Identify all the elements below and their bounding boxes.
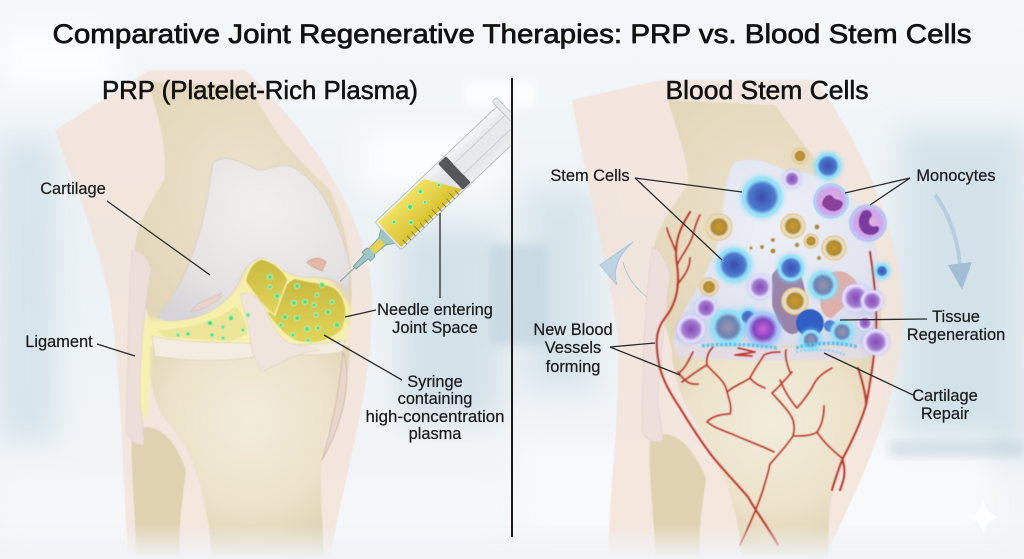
label: New Blood Vessels forming: Vessels: [545, 339, 601, 357]
right ligament: [322, 352, 347, 460]
label: Syringe containing high-concentration plasma: [324, 335, 504, 443]
label: Syringe containing high-concentration plasma: high-concentration: [366, 408, 504, 426]
title: Comparative Joint Regenerative Therapies: PRP vs. Blood Stem Cells: [52, 19, 972, 49]
needle: [340, 268, 355, 282]
label: Cartilage: Cartilage: [40, 180, 106, 198]
fibula: [132, 427, 186, 559]
fade at bottom of both legs: [0, 525, 1024, 559]
femur bone: [135, 82, 352, 325]
plasma: [378, 178, 462, 247]
femur bone: [652, 100, 881, 350]
fibula: [650, 434, 706, 559]
icon: syringe with plasma: [340, 98, 510, 282]
label: Tissue Regeneration: [840, 308, 1005, 344]
heading: PRP: PRP (Platelet-Rich Plasma): [102, 75, 418, 105]
label: Ligament: [25, 333, 135, 356]
cartilage on femur: [157, 159, 350, 321]
label: Syringe containing high-concentration plasma: containing: [398, 390, 472, 408]
lateral ligament: [126, 250, 151, 445]
cruciate ligament: [240, 293, 320, 372]
label: Cartilage Repair: [824, 353, 978, 423]
joint glow: [137, 262, 352, 420]
lateral ligament: [642, 247, 670, 442]
scale marks: [401, 189, 459, 244]
label: Tissue Regeneration: Tissue: [932, 308, 980, 326]
leg skin silhouette: [55, 70, 372, 559]
plateau band: [672, 340, 872, 361]
tibia: [149, 345, 350, 559]
new blood vessels: [657, 212, 876, 545]
label: Needle entering Joint Space: [345, 213, 493, 337]
cartilage dome: [675, 160, 879, 345]
label: New Blood Vessels forming: forming: [546, 358, 600, 376]
tibia: [672, 350, 872, 559]
barrel: [375, 107, 523, 250]
label: New Blood Vessels forming: New Blood: [533, 321, 613, 339]
label: Monocytes: Monocytes: [916, 167, 996, 185]
label: Stem Cells: [550, 167, 742, 260]
label: Monocytes: [845, 167, 996, 205]
meniscus and tibial plateau: [152, 336, 345, 360]
joint fluid blobs: [267, 278, 346, 343]
arrow: pale curved arrow left: [600, 242, 647, 297]
label: Ligament: Ligament: [25, 333, 93, 351]
hub: [352, 229, 395, 270]
heading: Blood Stem Cells: Blood Stem Cells: [666, 75, 868, 105]
leg skin silhouette: [572, 80, 903, 559]
plunger: [438, 156, 471, 190]
divider: [511, 78, 513, 537]
cartilage damage: [307, 258, 326, 271]
label: Syringe containing high-concentration plasma: Syringe: [407, 373, 463, 391]
panel: blood stem cells knee: [572, 80, 903, 559]
label: Needle entering Joint Space: Joint Space: [392, 319, 478, 337]
label: Cartilage: [40, 180, 210, 275]
label: Syringe containing high-concentration plasma: plasma: [409, 425, 462, 443]
label: Tissue Regeneration: Regeneration: [907, 326, 1005, 344]
label: Cartilage Repair: Repair: [921, 405, 970, 423]
label: Needle entering Joint Space: Needle entering: [377, 301, 493, 319]
arrow: pale curved arrow right: [935, 195, 972, 290]
stem cells, monocytes and gold growth factors: [678, 148, 888, 355]
blue cartilage repair crystals: [702, 343, 858, 348]
reddened damage area: [820, 271, 860, 318]
label: New Blood Vessels forming: [533, 321, 680, 376]
icon: sparkle watermark: [966, 499, 1000, 535]
label: Stem Cells: Stem Cells: [550, 167, 630, 185]
label: Cartilage Repair: Cartilage: [912, 387, 978, 405]
central notch: [772, 264, 806, 334]
platelets: [176, 274, 340, 342]
panel: PRP knee: [55, 70, 372, 559]
